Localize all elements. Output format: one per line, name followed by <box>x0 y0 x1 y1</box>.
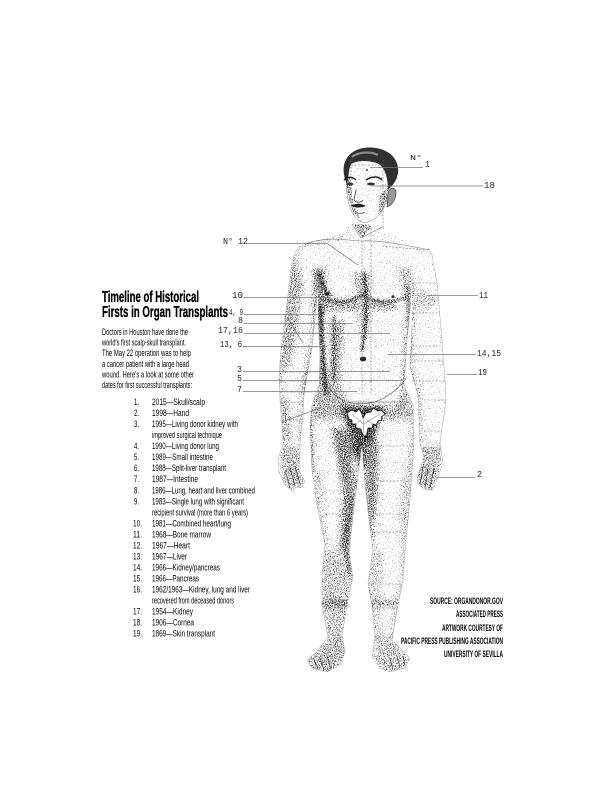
timeline list: 1987—Intestine <box>152 474 198 485</box>
label 1: N° <box>410 154 422 163</box>
timeline list: 2015—Skull/scalp <box>152 397 205 408</box>
illustration: anatomical male figure <box>278 148 446 672</box>
timeline list: 1967—Liver <box>152 552 188 562</box>
face features <box>344 169 382 214</box>
timeline list: 1983—Single lung with significant <box>152 496 244 508</box>
source credits: SOURCE: ORGANDONOR.GOV <box>430 596 503 607</box>
stippled body and head shading <box>278 161 446 672</box>
timeline list: 1986—Lung, heart and liver combined <box>152 486 255 496</box>
head outline <box>346 178 388 222</box>
intro text: Doctors in Houston have done the <box>102 327 188 338</box>
label 1: 1 <box>425 159 430 170</box>
label 18: 18 <box>484 180 495 191</box>
intro text: world's first scalp-skull transplant. <box>101 338 186 348</box>
body outline <box>278 246 446 672</box>
timeline list: 1962/1963—Kidney, lung and liver <box>152 584 251 596</box>
label 8 <box>238 315 353 326</box>
timeline list: 1967—Heart <box>152 540 190 552</box>
source credits: PACIFIC PRESS PUBLISHING ASSOCIATION <box>401 636 503 647</box>
timeline list: 17. <box>133 606 142 618</box>
label 19: 19 <box>478 367 487 378</box>
label 7: 7 <box>237 384 242 395</box>
ear <box>387 188 396 207</box>
hair <box>344 148 398 190</box>
timeline list: 1995—Living donor kidney with <box>152 419 238 430</box>
groin crease and arm seams <box>282 317 410 422</box>
intro text: wound. Here's a look at some other <box>101 370 194 380</box>
timeline list: 1968—Bone marrow <box>152 530 211 540</box>
timeline list: 1981—Combined heart/lung <box>152 518 231 530</box>
label 12: N° 12 <box>223 236 248 247</box>
timeline list: 1989—Small intestine <box>152 452 213 463</box>
timeline list: 1966—Kidney/pancreas <box>152 562 220 574</box>
timeline list: 8. <box>134 486 139 496</box>
label 2: 2 <box>477 469 482 480</box>
source credits <box>401 596 503 660</box>
label 11: 11 <box>479 290 488 301</box>
label 18 <box>372 180 495 191</box>
timeline list: 13. <box>133 552 142 562</box>
text: ASSOCIATED PRESS <box>456 609 503 620</box>
label 14,15: 14,15 <box>477 348 501 359</box>
timeline list: 1906—Cornea <box>152 618 194 628</box>
fingers and toes <box>285 466 434 670</box>
timeline list: 2. <box>134 408 139 419</box>
timeline list: 10. <box>133 518 142 530</box>
callout lines and numbers <box>218 154 501 480</box>
timeline list: 16. <box>133 584 142 596</box>
neck and collarbone lines <box>306 224 430 250</box>
label 10 <box>232 290 330 301</box>
timeline list: 4. <box>134 441 139 452</box>
label 4, 9 <box>229 307 320 318</box>
timeline list: recovered from deceased donors <box>152 596 234 606</box>
timeline list: 1998—Hand <box>152 408 189 419</box>
timeline list: 1954—Kidney <box>152 606 193 618</box>
label 13, 6: 13, 6 <box>220 339 242 350</box>
label 2 <box>437 469 482 480</box>
label 5: 5 <box>237 373 242 384</box>
title <box>102 289 228 321</box>
source credits: UNIVERSITY OF SEVILLA <box>444 649 503 660</box>
timeline list: 11. <box>133 530 142 540</box>
timeline list: 1966—Pancreas <box>152 574 199 584</box>
timeline list: 1869—Skin transplant <box>152 628 215 640</box>
label 10: 10 <box>232 290 243 301</box>
intro text: a cancer patient with a large head <box>102 359 189 370</box>
timeline list: 1990—Living donor lung <box>152 441 219 452</box>
timeline list: 18. <box>133 618 142 628</box>
label 4, 9: 4, 9 <box>229 307 243 318</box>
intro text: The May 22 operation was to help <box>102 348 191 359</box>
timeline list: 12. <box>133 540 142 552</box>
source credits: ARTWORK COURTESY OF <box>442 623 503 634</box>
label 12 <box>223 236 358 265</box>
title: Firsts in Organ Transplants <box>102 304 228 321</box>
timeline list: improved surgical technique <box>152 430 222 441</box>
measurement dashes on limbs and torso <box>280 160 446 637</box>
label 3: 3 <box>237 364 242 375</box>
label 17,16: 17,16 <box>218 325 243 336</box>
timeline list: 7. <box>134 474 139 485</box>
timeline list: 1. <box>134 397 139 408</box>
label 11 <box>427 290 488 301</box>
label 14,15 <box>388 348 501 359</box>
timeline list: 5. <box>134 452 139 463</box>
title: Timeline of Historical <box>102 289 199 306</box>
timeline list: 6. <box>134 463 139 474</box>
timeline list: 15. <box>133 574 142 584</box>
timeline list: recipient survival (more than 6 years) <box>152 508 248 518</box>
timeline list: 1988—Split-liver transplant <box>152 463 226 474</box>
timeline list: 9. <box>134 496 139 508</box>
label 1 <box>370 154 430 170</box>
intro text <box>101 327 194 391</box>
fig leaf <box>347 408 385 437</box>
timeline list <box>133 397 255 640</box>
label 7 <box>237 384 357 395</box>
timeline list: 3. <box>134 419 139 430</box>
intro text: dates for first successful transplants: <box>102 380 192 391</box>
label 19 <box>447 367 487 378</box>
label 8: 8 <box>238 315 243 326</box>
timeline list: 14. <box>133 562 142 574</box>
timeline list: 19. <box>133 628 142 640</box>
navel and nipples <box>325 292 395 361</box>
label 13, 6 <box>220 339 327 350</box>
